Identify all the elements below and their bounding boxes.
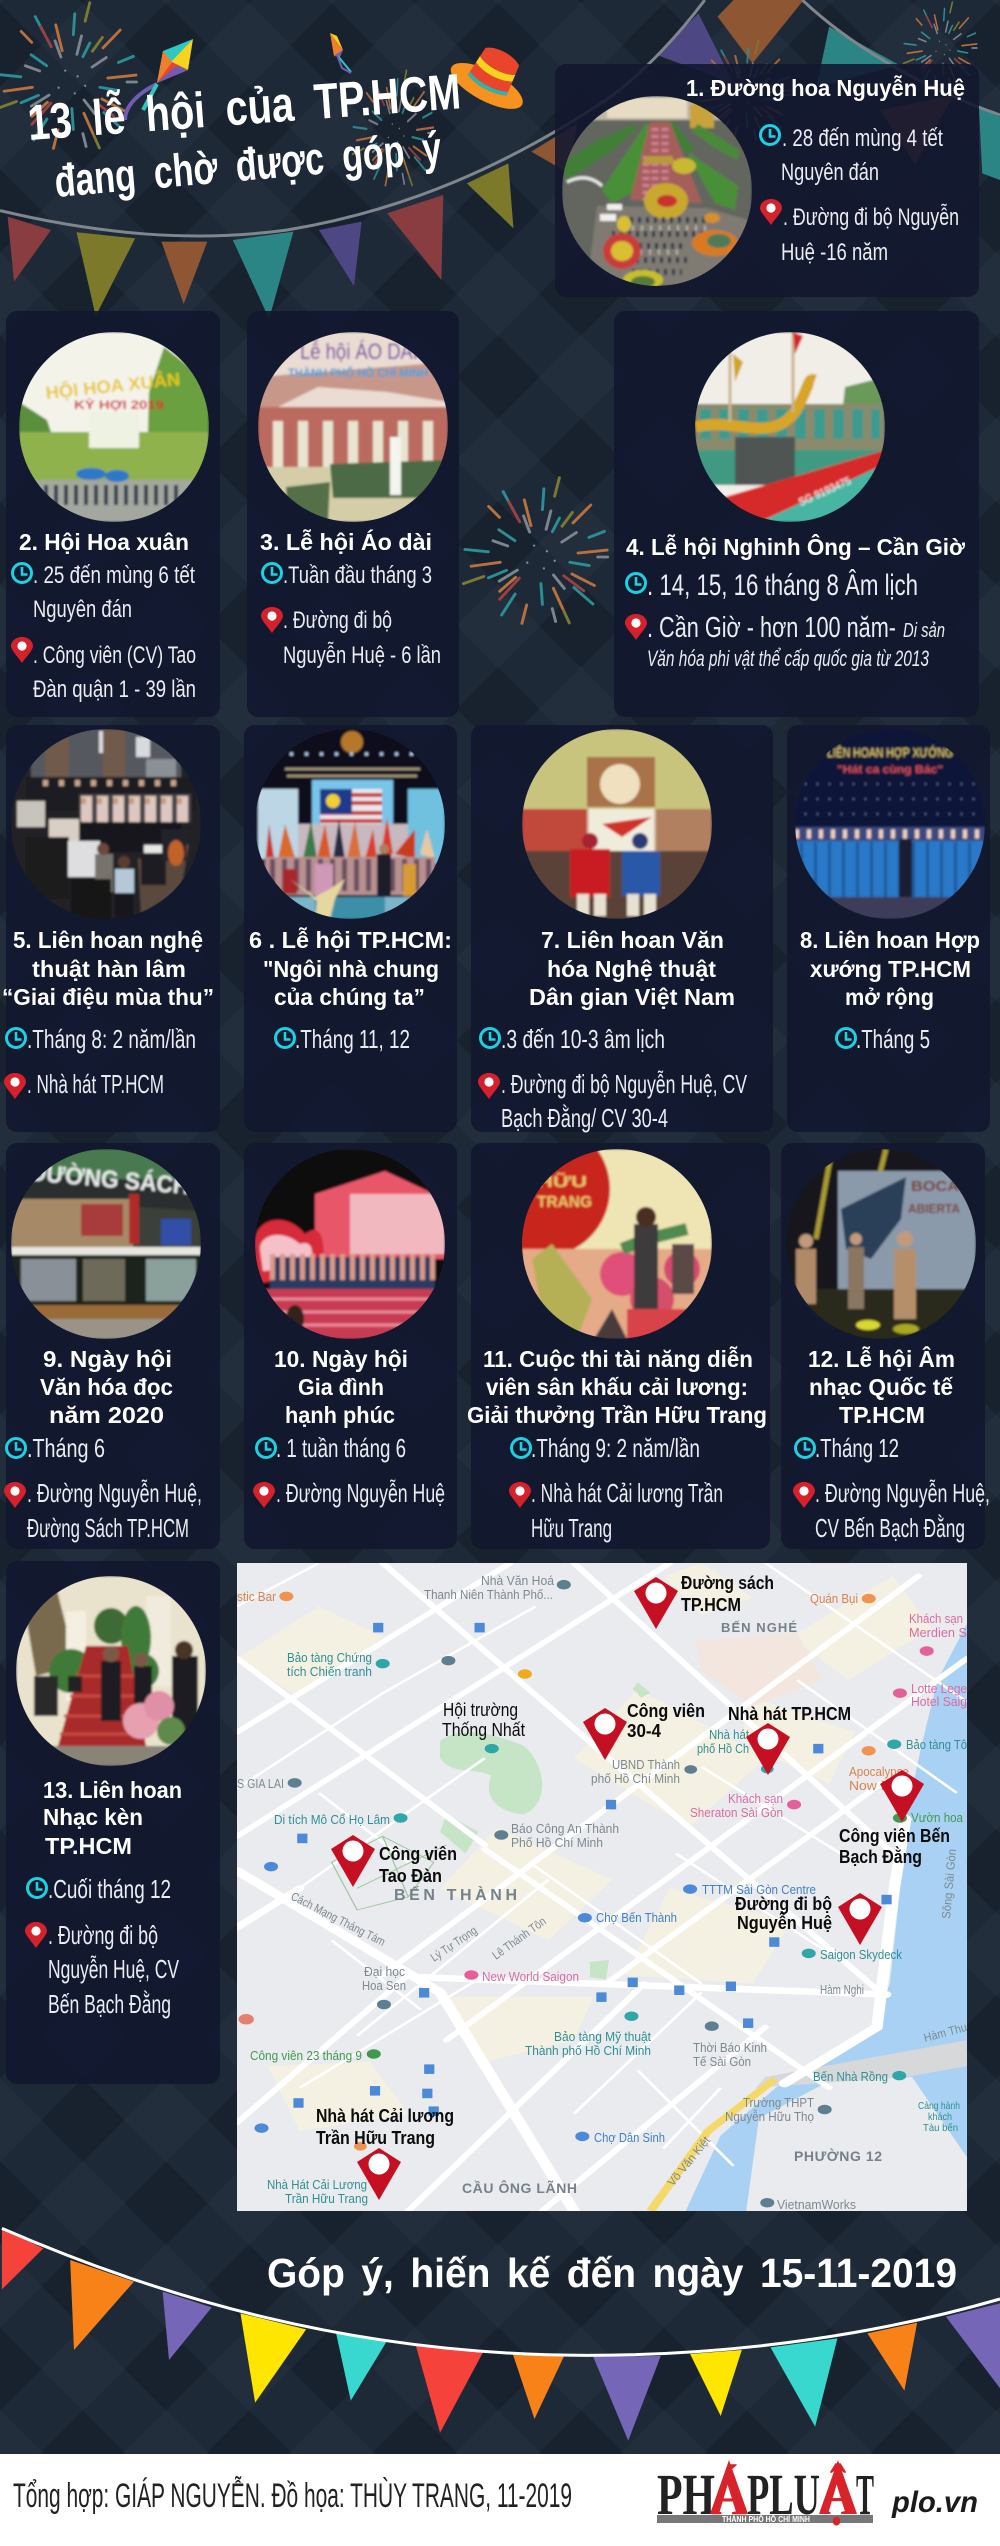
icon: pin: [261, 607, 283, 633]
card 11: Trần Hữu Trang: [467, 1121, 770, 1549]
map place names: Thành phố Hồ Chí Minh: [525, 2043, 651, 2058]
heading: 1. Đường hoa Nguyễn Huệ: [686, 74, 965, 101]
map bold labels: Tao Đàn: [379, 1866, 442, 1886]
date text: Nguyên đán: [781, 159, 879, 186]
map place names: Di tích Mô Cổ Họ Lâm: [274, 1812, 390, 1827]
map place names: Lê Thánh Tôn: [490, 1914, 549, 1962]
photo: [795, 729, 985, 919]
photo: THÀNH PHỐ HỒ CHÍ MINH: [288, 365, 428, 380]
photo: [255, 1149, 445, 1339]
map place names: Quán Bụi: [810, 1591, 858, 1606]
plo.vn: plo.vn: [891, 2486, 978, 2519]
map place names: Tế Sài Gòn: [693, 2054, 751, 2069]
heading: 2. Hội Hoa xuân: [19, 529, 189, 555]
card 13: Nhạc kèn: [6, 1561, 220, 2084]
location text: [781, 204, 959, 266]
card 12: Âm nhạc Quốc tế: [781, 1143, 990, 1549]
photo: [11, 729, 201, 919]
map place names: Lý Tự Trọng: [428, 1923, 480, 1964]
icon: clock: [6, 1438, 26, 1458]
date text: .3 đến 10-3 âm lịch: [501, 1024, 665, 1054]
map pin: Đường sách: [634, 1577, 678, 1629]
map pin: Nguyễn Huệ: [838, 1893, 882, 1945]
map pin: Công viên 30-4: [583, 1708, 627, 1760]
photo: [522, 729, 712, 919]
map bold labels: Công viên: [627, 1701, 705, 1721]
location text: [283, 607, 441, 669]
map place names: Khách sạn: [728, 1791, 783, 1806]
logo: Pháp Luật: [657, 2460, 874, 2527]
heading: [800, 927, 980, 1010]
heading: 13. Liên hoan: [43, 1777, 182, 1803]
heading: Nhạc kèn: [43, 1804, 143, 1830]
location text: Bến Bạch Đằng: [48, 1989, 171, 2019]
photo: TRANG: [537, 1194, 592, 1211]
location text: . Đường Nguyễn Huệ: [276, 1478, 445, 1508]
photo: [786, 1149, 976, 1339]
footer: [0, 2454, 1000, 2546]
icon: pin: [793, 1482, 815, 1508]
footer: T: [856, 2462, 874, 2527]
firework near title: [353, 70, 434, 185]
map place names: Sông Sài Gòn: [939, 1848, 959, 1919]
photo: SG 9193475: [797, 475, 853, 509]
photo: [19, 332, 209, 522]
location text: Đường Sách TP.HCM: [27, 1513, 189, 1543]
firework behind card 1: [695, 41, 790, 140]
photo: BOCA: [911, 1178, 959, 1195]
map place names: VietnamWorks: [777, 2197, 856, 2212]
heading: [529, 927, 735, 1010]
heading: 4. Lễ hội Nghinh Ông – Cần Giờ: [626, 533, 966, 560]
call to action: Góp ý, hiến kế đến ngày 15-11-2019: [267, 2250, 957, 2296]
map place names: Phố Hồ Chí Minh: [511, 1835, 603, 1850]
card 8: Hợp xướng: [787, 725, 990, 1132]
map place names: Nhà Hát Cải Lương: [267, 2177, 367, 2192]
map place names: phố Hồ Chí Minh: [591, 1771, 680, 1786]
location text: . Đường đi bộ: [48, 1920, 158, 1950]
map place names: BẾN THÀNH: [394, 1885, 517, 1904]
photo: [258, 332, 448, 522]
photo: LIÊN HOAN HỢP XƯỚNG: [827, 745, 953, 760]
map place names: Vườn hoa: [911, 1810, 964, 1825]
map bold labels: Thống Nhất: [442, 1720, 525, 1740]
map place names: Thanh Niên Thành Phố...: [424, 1587, 553, 1602]
heading: TP.HCM: [45, 1833, 132, 1859]
heading: 5. Liên hoan nghệ: [13, 927, 203, 953]
map place names: Hàm Thu: [922, 2020, 968, 2045]
small map markers: [288, 1580, 832, 2207]
map pin: Tao Đàn: [331, 1835, 375, 1887]
map pin: Nhà hát TP.HCM: [746, 1723, 790, 1775]
map place names: Bảo tàng Mỹ thuật: [554, 2029, 651, 2044]
map bold labels: Nhà hát TP.HCM: [728, 1704, 851, 1724]
heading: “Giai điệu mùa thu”: [2, 984, 214, 1010]
heading: [808, 1345, 955, 1428]
map place names: Trường THPT: [743, 2095, 814, 2110]
firework top right: [903, 2, 977, 86]
location text: . Nhà hát Cải lương Trần: [531, 1478, 723, 1508]
heading: viên sân khấu cải lương:: [486, 1374, 748, 1400]
location text: [647, 612, 945, 671]
map place names: Hotel Saig: [911, 1694, 967, 1709]
icon: pin: [478, 1073, 500, 1099]
map place names: tích Chiến tranh: [287, 1664, 372, 1679]
credits: Tổng hợp: GIÁP NGUYỄN. Đồ họa: THÙY TRANG, 11-2019: [13, 2477, 572, 2515]
photo: HỮU: [537, 1171, 587, 1191]
heading: năm 2020: [49, 1402, 164, 1428]
map place names: Merdien S: [909, 1625, 967, 1640]
map place names: Now B: [849, 1778, 890, 1793]
map place names: BẾN NGHÉ: [721, 1620, 797, 1635]
icon: hat: [444, 33, 540, 118]
photo: [562, 96, 752, 290]
card 9: Ngày hội Văn hóa đọc: [4, 1143, 220, 1549]
heading: hạnh phúc: [285, 1402, 395, 1428]
heading: của chúng ta”: [274, 984, 425, 1010]
card 5: Giai điệu mùa thu: [2, 725, 220, 1132]
location text: Bạch Đằng/ CV 30-4: [501, 1103, 668, 1133]
location text: [815, 1478, 990, 1543]
map place names: S GIA LAI: [237, 1776, 284, 1791]
heading: hóa Nghệ thuật: [547, 956, 716, 982]
icon: pin: [760, 199, 782, 225]
location text: Hữu Trang: [531, 1513, 612, 1543]
date text: .Tháng 11, 12: [295, 1024, 410, 1054]
date text: .Tháng 5: [856, 1024, 930, 1054]
map place names: Khách sạn: [909, 1611, 963, 1626]
icon: pin: [625, 614, 647, 640]
card 3: Lễ hội Áo dài: [247, 311, 459, 717]
heading: Giải thưởng Trần Hữu Trang: [467, 1402, 767, 1428]
icon: clock: [6, 1028, 26, 1048]
date text: .Cuối tháng 12: [48, 1874, 171, 1904]
icon: clock: [262, 564, 282, 582]
card 2: Hội Hoa xuân: [6, 311, 220, 717]
date text: . 1 tuần tháng 6: [276, 1433, 406, 1463]
card 1: Đường hoa Nguyễn Huệ: [555, 64, 979, 297]
heading: [249, 926, 452, 1010]
title: 13 lễ hội của TP.HCM: [26, 63, 463, 151]
title: đang chờ được góp ý: [52, 121, 444, 207]
map bold labels: TP.HCM: [681, 1595, 741, 1615]
map place names: Cách Mạng Tháng Tám: [289, 1889, 388, 1949]
heading: Gia đình: [298, 1374, 384, 1400]
photo: ĐƯỜNG SÁCH: [29, 1158, 191, 1200]
title: [26, 63, 463, 207]
heading: [467, 1345, 767, 1428]
map bold labels: Hội trường: [443, 1700, 518, 1720]
date text: .Tháng 12: [815, 1433, 899, 1463]
map bold labels: Trần Hữu Trang: [316, 2128, 435, 2148]
heading: xướng TP.HCM: [810, 956, 971, 982]
map place names: Tàu bến: [923, 2122, 958, 2134]
location text: Đàn quận 1 - 39 lần: [33, 676, 196, 703]
map bold labels: Công viên: [379, 1844, 457, 1864]
location text: . Công viên (CV) Tao: [33, 642, 196, 669]
location text: [33, 642, 196, 703]
map place names: Trần Hữu Trang: [285, 2191, 368, 2206]
location text: Nguyễn Huệ - 6 lần: [283, 642, 441, 669]
date text: .Tháng 9: 2 năm/lần: [531, 1433, 700, 1463]
icon: clock: [276, 1028, 294, 1048]
map place names: Chợ Dân Sinh: [594, 2130, 665, 2145]
map bold labels: Đường sách: [681, 1573, 774, 1593]
photo: HỘI HOA XUÂN: [45, 368, 181, 403]
icon: clock: [12, 564, 32, 582]
map place names: New World Saigon: [482, 1969, 579, 1984]
map bold labels: Nguyễn Huệ: [737, 1912, 832, 1933]
map place names: Công viên 23 tháng 9: [250, 2048, 362, 2063]
icon: kite large: [125, 39, 193, 120]
map pin: Cải lương: [357, 2148, 401, 2200]
date text: .Tháng 8: 2 năm/lần: [27, 1024, 196, 1054]
beige blocks: [237, 1563, 931, 2131]
map place names: Bảo tàng Chứng: [287, 1650, 372, 1665]
location text: . Nhà hát TP.HCM: [27, 1069, 164, 1099]
location text: . Đường Nguyễn Huệ,: [27, 1478, 202, 1508]
icon: clock: [760, 126, 780, 144]
location text: [531, 1478, 723, 1543]
photo: [11, 1149, 201, 1339]
heading: 7. Liên hoan Văn: [541, 927, 724, 953]
location text: [501, 1069, 747, 1133]
location text: . Đường đi bộ: [283, 607, 392, 634]
heading: Văn hóa đọc: [40, 1374, 173, 1400]
heading: 3. Lễ hội Áo dài: [260, 528, 432, 555]
park: [440, 1682, 651, 1979]
heading: mở rộng: [845, 984, 934, 1010]
date text: . 25 đến mùng 6 tết: [33, 562, 195, 589]
date text: [781, 125, 943, 186]
map place names: Bến Nhà Rồng: [813, 2069, 888, 2084]
heading: 6 . Lễ hội TP.HCM:: [249, 926, 452, 953]
map place names: Hoa Sen: [362, 1978, 406, 1993]
heading: nhạc Quốc tế: [809, 1374, 953, 1400]
map place names: Hàm Nghi: [820, 1982, 864, 1997]
heading: 9. Ngày hội: [43, 1346, 172, 1372]
map: [237, 1563, 968, 2212]
map place names: [237, 1573, 968, 2212]
photo: [522, 1149, 712, 1339]
map place names: Chợ Bến Thành: [596, 1910, 677, 1925]
photo: [695, 332, 885, 522]
map place names: stic Bar: [237, 1589, 277, 1604]
icon: clock: [796, 1438, 814, 1458]
heading: TP.HCM: [839, 1402, 925, 1428]
heading: 12. Lễ hội Âm: [808, 1345, 955, 1372]
map place names: Báo Công An Thành: [511, 1821, 619, 1836]
location text: Huệ -16 năm: [781, 239, 888, 266]
map place names: Nhà hát: [709, 1727, 749, 1742]
icon: clock: [480, 1028, 500, 1048]
icon: pin: [253, 1482, 275, 1508]
river: [686, 1624, 967, 2211]
map place names: Nguyễn Hữu Thọ: [725, 2109, 814, 2124]
heading: 11. Cuộc thi tài năng diễn: [483, 1345, 753, 1372]
map place names: phố Hồ Ch: [697, 1741, 749, 1756]
location text: . Đường đi bộ Nguyễn Huệ, CV: [501, 1069, 747, 1099]
heading: thuật hàn lâm: [32, 956, 186, 982]
icon: clock: [28, 1878, 46, 1898]
map place names: Bảo tàng Tô: [906, 1737, 967, 1752]
icon: pin: [11, 637, 33, 663]
icon: clock: [836, 1028, 856, 1048]
map bold labels: Công viên Bến: [839, 1826, 950, 1846]
map place names: Saigon Skydeck: [820, 1947, 902, 1962]
location text: Nguyễn Huệ, CV: [48, 1954, 179, 1984]
photo: Lễ hội ÁO DÀI: [300, 339, 418, 364]
map bold labels: 30-4: [627, 1721, 661, 1741]
location text: [48, 1920, 179, 2019]
icon: pin: [4, 1482, 26, 1508]
map place names: Nhà Văn Hoá: [481, 1573, 555, 1588]
card 10: Gia đình hạnh phúc: [244, 1143, 457, 1549]
map place names: Đại học: [364, 1964, 405, 1979]
card 7: Văn hóa Nghệ thuật Dân gian: [471, 725, 773, 1133]
map bold labels: Đường đi bộ: [735, 1894, 832, 1914]
photo: ABIERTA: [908, 1201, 961, 1216]
map place names: PHƯỜNG 12: [794, 2147, 882, 2164]
map bold labels: [316, 1573, 950, 2148]
map place names: UBND Thành: [612, 1757, 680, 1772]
firework top left: [0, 3, 136, 148]
heading: "Ngôi nhà chung: [263, 956, 439, 982]
icon: clock: [256, 1438, 276, 1458]
heading: [40, 1346, 173, 1428]
map place names: Cảng hành: [918, 2101, 960, 2112]
heading: [274, 1346, 408, 1428]
map place names: Apocalypse: [849, 1764, 909, 1779]
photo: [16, 1576, 206, 1766]
location text: Di sản: [903, 620, 945, 642]
photo: "Hát ca cùng Bác": [837, 764, 943, 776]
map place names: Thời Báo Kinh: [693, 2040, 767, 2055]
date text: .Tuần đầu tháng 3: [283, 562, 432, 589]
date text: . 28 đến mùng 4 tết: [782, 125, 943, 152]
photo: KỲ HỢI 2019: [74, 397, 164, 412]
map pin: Bến Bạch Đằng: [880, 1770, 924, 1822]
date text: .Tháng 6: [27, 1433, 105, 1463]
roads: [237, 1563, 967, 2211]
heading: 10. Ngày hội: [274, 1346, 408, 1372]
heading: [43, 1777, 182, 1859]
icon: kite small: [330, 33, 351, 73]
logo: Pháp Luật: PLU: [747, 2462, 820, 2527]
card 6: Ngôi nhà chung: [244, 725, 457, 1132]
top bunting: [0, 0, 1000, 319]
firework middle: [463, 478, 608, 623]
map place names: Lotte Lege: [911, 1681, 967, 1696]
logo: Pháp Luật: Á: [711, 2462, 747, 2527]
map bold labels: Bạch Đằng: [839, 1846, 922, 1867]
logo: Pháp Luật: THÀNH PHỐ HỒ CHÍ MINH: [722, 2513, 810, 2524]
map place names: khách: [928, 2112, 952, 2123]
map place names: CẦU ÔNG LÃNH: [462, 2179, 577, 2196]
icon: pin: [509, 1482, 531, 1508]
bottom bunting: [2, 2228, 1000, 2441]
icon: clock: [512, 1438, 530, 1458]
heading: Dân gian Việt Nam: [529, 984, 735, 1010]
logo: Pháp Luật: PH: [657, 2462, 715, 2527]
location text: . Cần Giờ - hơn 100 năm-: [647, 612, 896, 644]
logo: Pháp Luật: Ậ: [820, 2462, 856, 2527]
map place names: Sheraton Sài Gòn: [690, 1805, 783, 1820]
photo: [255, 729, 445, 919]
heading: 8. Liên hoan Hợp: [800, 927, 980, 953]
heading: [2, 927, 214, 1010]
map place names: Võ Văn Kiệt: [664, 2133, 713, 2189]
location text: [27, 1478, 202, 1543]
map bold labels: Nhà hát Cải lương: [316, 2106, 454, 2126]
date text: [33, 562, 195, 623]
icon: pin: [4, 1073, 26, 1099]
map place names: TTTM Sài Gòn Centre: [702, 1882, 816, 1897]
icon: pin: [25, 1922, 47, 1948]
icon: clock: [626, 574, 646, 592]
date text: Nguyên đán: [33, 596, 132, 623]
card 4: Lễ hội Nghinh Ông: [614, 311, 979, 717]
